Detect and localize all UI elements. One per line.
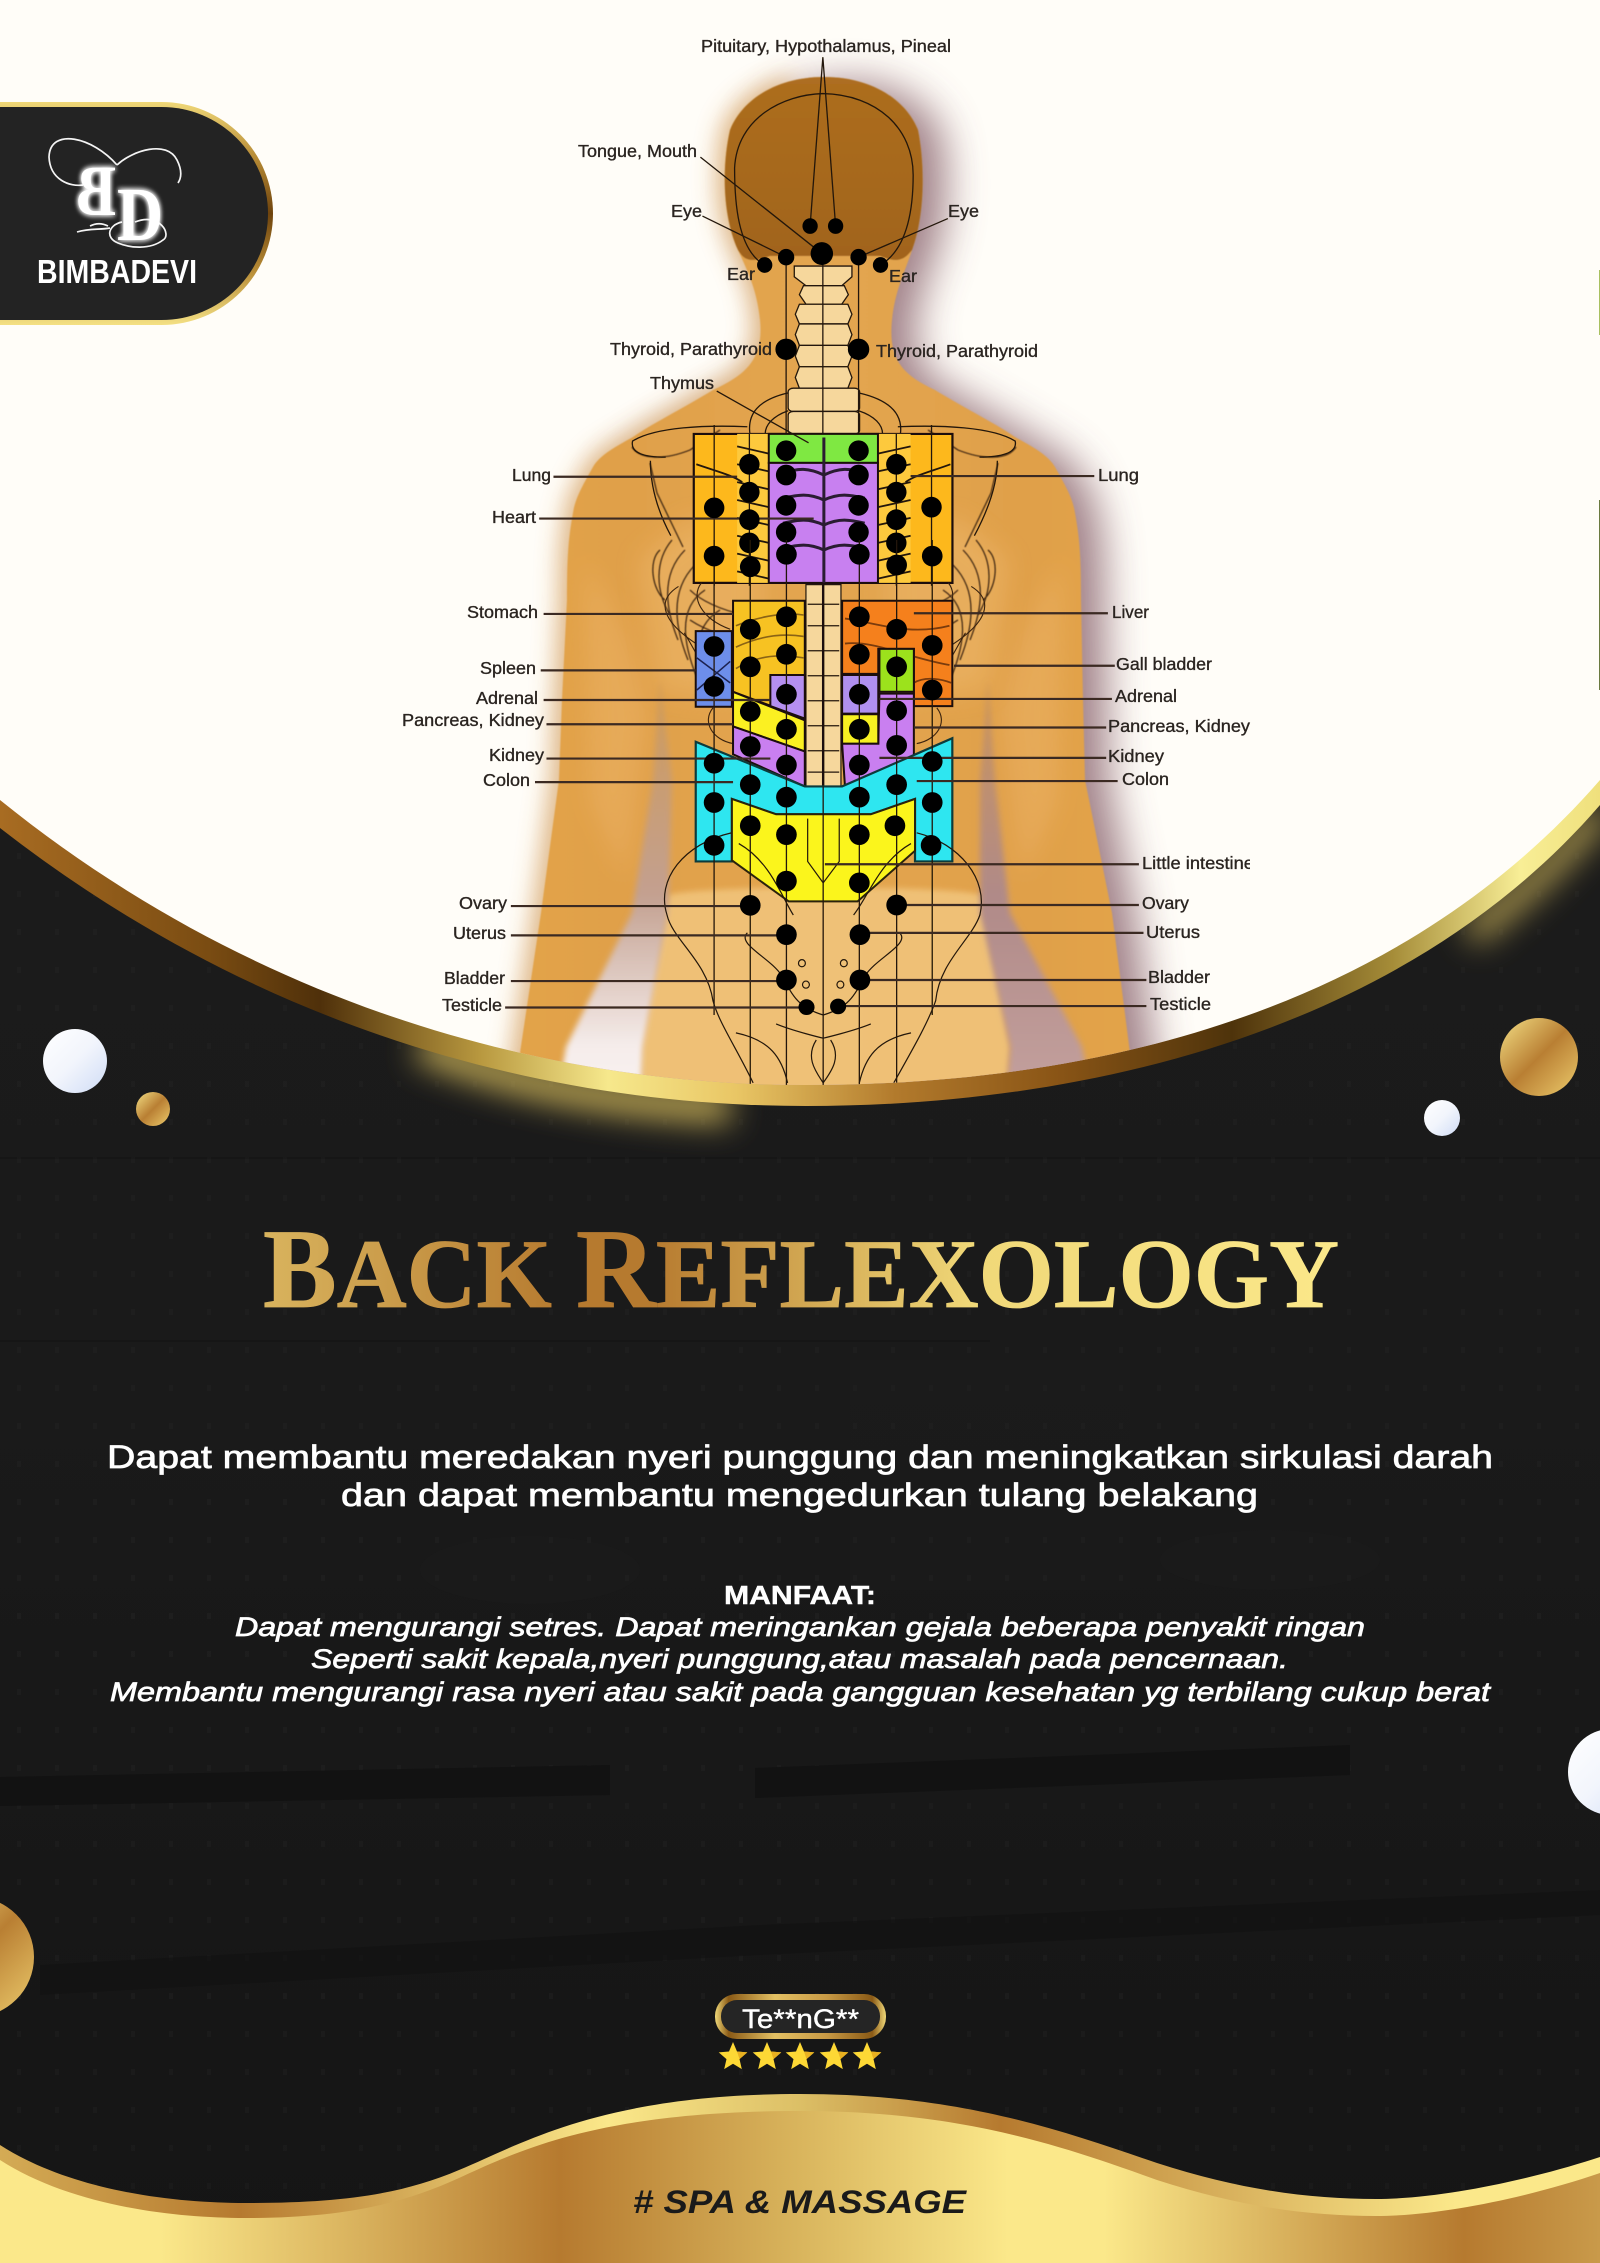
benefits text: [110, 1580, 1492, 1707]
spleen zone: [696, 631, 732, 707]
organ labels: Uterus: [453, 923, 506, 943]
organ labels: Pancreas, Kidney: [402, 710, 544, 730]
rib outlines: [665, 583, 985, 744]
intro paragraph: Dapat membantu meredakan nyeri punggung dan meningkatkan sirkulasi darah: [107, 1439, 1493, 1475]
leader lines head: [700, 57, 948, 443]
organ labels: Uterus: [1146, 922, 1200, 942]
thymus zone: [769, 434, 878, 463]
colon zone: [696, 738, 952, 861]
points upper: [704, 218, 942, 553]
benefits lines: [110, 1612, 1492, 1707]
decorative circle: small white right: [1424, 1100, 1460, 1136]
organ labels: Colon: [1122, 769, 1169, 789]
organ labels: Thymus: [650, 373, 714, 393]
organ labels: Lung: [512, 465, 551, 485]
organ labels: Spleen: [480, 658, 536, 678]
anatomy upper: head, neck, upper back zones: [539, 57, 1094, 586]
organ labels: Pituitary, Hypothalamus, Pineal: [701, 36, 951, 56]
organ labels: Ovary: [459, 893, 507, 913]
organ labels: Little intestine: [1142, 853, 1254, 873]
white top panel: [0, 0, 1600, 1085]
organ labels: Tongue, Mouth: [578, 141, 697, 161]
organ labels: Ear: [889, 266, 917, 286]
footer wave fill: [0, 2111, 1600, 2263]
organ labels: Adrenal: [1115, 686, 1177, 706]
benefits heading: MANFAAT:: [724, 1580, 876, 1610]
decorative circle: white left: [43, 1029, 107, 1093]
adrenal left: [770, 675, 805, 719]
decorative circle: gold left edge: [0, 1897, 34, 2017]
gall bladder zone: [879, 649, 914, 692]
benefits lines: Dapat mengurangi setres. Dapat meringankan gejala beberapa penyakit ringan: [235, 1612, 1365, 1642]
decorative circle: gold right: [1500, 1018, 1578, 1096]
organ labels: Pancreas, Kidney: [1108, 716, 1250, 736]
logo monogram: D: [117, 173, 163, 257]
kidney right: [842, 694, 914, 786]
organ labels: Gall bladder: [1116, 654, 1212, 674]
gold curved border: [0, 0, 1600, 1106]
organ labels: Kidney: [489, 745, 544, 765]
rib cage outlines: [632, 430, 1016, 705]
organ labels: Eye: [948, 201, 979, 221]
reviewer name badge: [715, 1994, 886, 2039]
organ labels: Thyroid, Parathyroid: [876, 341, 1038, 361]
footer gold wave: [0, 2094, 1600, 2263]
organ labels: Colon: [483, 770, 530, 790]
organ labels: [402, 36, 1254, 1015]
logo monogram: B: [77, 152, 116, 231]
organ labels: Bladder: [444, 968, 505, 988]
leader lines: [505, 613, 1146, 1007]
organ labels: Ear: [727, 264, 755, 284]
reflexology back diagram: [402, 36, 1254, 1134]
golden glow under curve: [420, 810, 1600, 1108]
heart zone: [769, 463, 878, 583]
title: BACK REFLEXOLOGY: [263, 1207, 1339, 1332]
organ labels: Ovary: [1142, 893, 1189, 913]
neck vertebrae: [788, 266, 860, 434]
pancreas right: [842, 714, 878, 744]
adrenal right: [842, 675, 878, 714]
organ labels: Testicle: [442, 995, 502, 1015]
organ labels: Kidney: [1108, 746, 1164, 766]
stomach zone: [733, 601, 805, 719]
intro paragraph: dan dapat membantu mengedurkan tulang belakang: [341, 1477, 1258, 1513]
organ labels: Bladder: [1148, 967, 1210, 987]
kidney left: [733, 726, 805, 786]
logo pill dark fill: [0, 107, 268, 320]
decorative circle: small gold left: [136, 1092, 170, 1126]
organ labels: Adrenal: [476, 688, 538, 708]
organ labels: Eye: [671, 201, 702, 221]
organ labels: Thyroid, Parathyroid: [610, 339, 772, 359]
benefits lines: Membantu mengurangi rasa nyeri atau sakit pada gangguan kesehatan yg terbilang cukup berat: [110, 1677, 1492, 1707]
pancreas left: [733, 692, 805, 751]
logo badge: [0, 102, 273, 325]
organ labels: Heart: [492, 507, 536, 527]
intro paragraph: [107, 1439, 1493, 1513]
benefits lines: Seperti sakit kepala,nyeri punggung,atau masalah pada pencernaan.: [311, 1644, 1288, 1674]
body and head: [505, 77, 1145, 1130]
anatomy lower: organ zones, spine, pelvis: [505, 540, 1146, 1086]
five star rating: [719, 2042, 881, 2069]
reviewer name badge: Te**nG**: [742, 2004, 860, 2034]
organ labels: Testicle: [1150, 994, 1211, 1014]
body shadow: [497, 75, 1169, 1134]
pelvis and sacrum lines: [664, 819, 981, 1083]
decorative circle: white right edge: [1568, 1729, 1600, 1815]
logo pill gold border: [0, 102, 273, 325]
footer wave band: [0, 2094, 1600, 2263]
organ labels: Liver: [1112, 602, 1149, 622]
logo wordmark: BIMBADEVI: [37, 253, 197, 290]
small intestine zone: [732, 799, 915, 901]
organ labels: Lung: [1098, 465, 1139, 485]
logo monogram: [49, 139, 181, 257]
spine: [806, 585, 841, 786]
liver zone: [842, 601, 952, 706]
organ labels: Stomach: [467, 602, 538, 622]
points lower: [704, 544, 943, 1015]
lung zones: [694, 434, 952, 583]
footer hashtag: # SPA & MASSAGE: [633, 2184, 968, 2220]
